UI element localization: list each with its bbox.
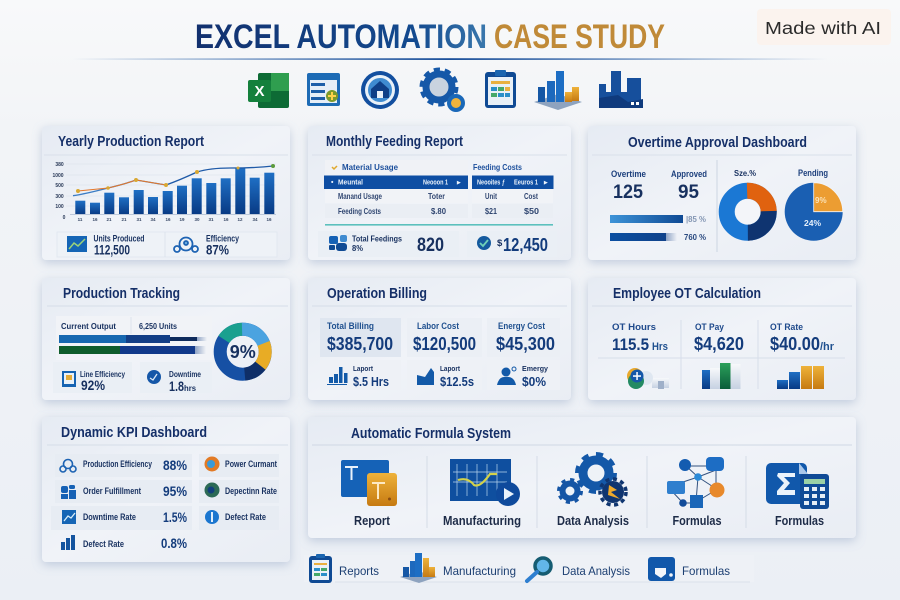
heading: Yearly Production Report xyxy=(58,133,204,150)
table: Material Usage xyxy=(342,162,398,172)
heading: Overtime Approval Dashboard xyxy=(628,134,807,151)
metric: OT pay xyxy=(694,322,744,354)
progress bars: 760 % xyxy=(684,233,706,242)
metric: total billing: Total Billing xyxy=(327,321,374,331)
table: Feeding Costs xyxy=(473,162,522,172)
overtime figures: Overtime xyxy=(611,169,646,179)
header icon row xyxy=(248,70,643,110)
bar and line chart: 30 xyxy=(194,217,200,222)
metric: OT hours xyxy=(612,322,668,354)
icon: gears xyxy=(422,70,463,110)
bar and line chart: 19 xyxy=(179,217,185,222)
metric: total billing: $385,700 xyxy=(327,334,393,354)
icon: people xyxy=(497,367,516,385)
stats: total feedings and cost: 820 xyxy=(417,235,444,256)
bar and line chart: 31 xyxy=(136,217,142,222)
sub metric: emergy: Emergy xyxy=(522,366,548,373)
stats: downtime: 1.8 xyxy=(169,378,184,394)
chart: OT rate bars xyxy=(777,366,824,389)
KPI: defect rate right xyxy=(205,510,266,524)
icon: line efficiency xyxy=(62,371,76,387)
metric: total billing xyxy=(320,318,401,357)
overtime figures: 125 xyxy=(613,182,643,203)
metric: labor cost: Labor Cost xyxy=(417,321,459,331)
current output bars: 6,250 Units xyxy=(139,321,177,331)
stats: total feedings and cost: Total Feedings xyxy=(352,234,402,244)
stats: total feedings and cost: 8% xyxy=(352,243,363,253)
stats: line efficiency xyxy=(53,362,132,393)
legend: manufacturing xyxy=(400,553,516,583)
KPI: production efficiency xyxy=(60,457,187,473)
panel: overtime approval dashboard xyxy=(588,126,856,260)
metric: OT pay: $4,620 xyxy=(694,334,744,354)
item: formulas calculator: Formulas xyxy=(775,514,824,528)
icon: downtime gauge xyxy=(147,370,161,384)
table: Cost xyxy=(524,191,538,201)
metric: OT rate: /hr xyxy=(820,341,835,353)
bar and line chart: 16 xyxy=(223,217,229,222)
icon: check circle xyxy=(477,236,491,250)
bar and line chart: 16 xyxy=(92,217,98,222)
KPI: power current: Power Curmant xyxy=(225,459,277,469)
icon: excel xyxy=(248,73,289,108)
bar and line chart: 21 xyxy=(121,217,127,222)
metric: OT hours: 115.5 xyxy=(612,335,649,354)
chart: OT pay bars xyxy=(702,363,740,389)
metric: labor cost xyxy=(407,318,482,357)
table: Neooites ƒ xyxy=(477,180,505,186)
sub metric: emergy xyxy=(487,360,560,390)
KPI: production efficiency: Production Efficiency xyxy=(83,459,152,469)
title: CASE STUDY xyxy=(494,18,665,56)
bar and line chart: 31 xyxy=(208,217,214,222)
KPI: order fulfillment xyxy=(61,483,187,499)
panel: dynamic KPI dashboard xyxy=(42,417,290,562)
bar and line chart: 34 xyxy=(150,217,156,222)
metric: OT rate: OT Rate xyxy=(770,322,803,333)
bar and line chart: 300 xyxy=(55,194,64,200)
icon: dial xyxy=(361,71,399,109)
bar and line chart: 0 xyxy=(63,215,66,221)
legend: reports xyxy=(309,554,379,583)
table: $21 xyxy=(485,206,497,216)
icon: factory xyxy=(599,71,643,108)
pie chart: Pending xyxy=(798,168,828,178)
bar and line chart: 21 xyxy=(106,217,112,222)
donut chart: 9% xyxy=(211,320,274,383)
panel: monthly feeding report xyxy=(308,126,571,260)
table: • xyxy=(331,180,334,186)
stats: downtime: hrs xyxy=(184,383,196,393)
table: Meuntal xyxy=(338,180,363,186)
heading: Monthly Feeding Report xyxy=(326,133,463,150)
table: Unit xyxy=(485,191,497,201)
stats: units produced and efficiency: 112,500 xyxy=(94,242,130,258)
metric: energy cost: Energy Cost xyxy=(498,321,545,331)
table: Eeuros 1 xyxy=(514,180,538,186)
overtime figures: 95 xyxy=(678,182,699,203)
badge: made with AI xyxy=(757,9,891,45)
bar and line chart: 100 xyxy=(55,204,64,210)
heading: Automatic Formula System xyxy=(351,425,511,442)
item: data analysis: Data Analysis xyxy=(557,514,629,528)
metric: OT hours: OT Hours xyxy=(612,322,656,333)
table: Manand Usage xyxy=(338,191,382,201)
progress bars: |85 % xyxy=(686,215,706,224)
heading: Production Tracking xyxy=(63,285,180,302)
stats: downtime: Downtime xyxy=(169,370,201,379)
KPI: defect rate right: Defect Rate xyxy=(225,512,266,522)
metric: OT rate: $40.00 xyxy=(770,334,820,354)
metric: labor cost: $120,500 xyxy=(413,334,476,354)
icon: clipboard xyxy=(485,70,516,108)
KPI: power current xyxy=(204,456,277,472)
sub metric: laport hours xyxy=(320,360,401,390)
legend row xyxy=(304,553,754,583)
bar and line chart: 500 xyxy=(55,183,64,189)
KPI: downtime rate: 1.5% xyxy=(163,509,187,525)
donut chart xyxy=(727,168,769,233)
table: ▸ xyxy=(543,180,548,186)
sub metric: emergy: $0% xyxy=(522,374,546,389)
legend: reports: Reports xyxy=(339,564,379,578)
sub metric: laport seconds xyxy=(407,360,482,390)
panel: employee OT calculation xyxy=(588,278,856,400)
current output bars: Current Output xyxy=(61,321,116,331)
sub metric: laport hours: $.5 Hrs xyxy=(353,374,389,389)
item: report: Report xyxy=(354,514,391,528)
bar and line chart: 16 xyxy=(266,217,272,222)
legend: data analysis: Data Analysis xyxy=(562,564,630,578)
heading: Employee OT Calculation xyxy=(613,285,761,302)
heading: Operation Billing xyxy=(327,285,427,302)
panel: yearly production report xyxy=(42,126,290,260)
sub metric: laport hours: Laport xyxy=(353,366,374,373)
stats: total feedings and cost: $ xyxy=(497,238,503,249)
KPI: downtime rate: Downtime Rate xyxy=(83,512,136,522)
progress bars xyxy=(610,215,706,242)
icon: form xyxy=(307,73,340,106)
icon: trend chart xyxy=(67,236,87,252)
stats: units produced and efficiency: 87% xyxy=(206,242,229,258)
bar and line chart: 380 xyxy=(55,162,64,168)
title: EXCEL AUTOMATION xyxy=(195,18,487,56)
pie chart: 24% xyxy=(804,218,821,228)
overtime figures xyxy=(611,169,707,203)
KPI: defect rate: Defect Rate xyxy=(83,539,124,549)
metric: energy cost xyxy=(487,318,560,357)
KPI: defect rate xyxy=(61,535,187,551)
icon: blocks xyxy=(329,235,347,251)
heading: Dynamic KPI Dashboard xyxy=(61,424,207,441)
item: formulas calculator xyxy=(766,463,829,528)
item: manufacturing: Manufacturing xyxy=(443,514,521,528)
KPI: depection rate: Depectinn Rate xyxy=(225,486,277,496)
metric: energy cost: $45,300 xyxy=(496,334,555,354)
icon: coins and globe xyxy=(627,368,669,389)
KPI: order fulfillment: 95% xyxy=(163,483,187,499)
legend: formulas xyxy=(648,557,730,581)
current output bars xyxy=(56,316,212,360)
table: ▸ xyxy=(456,180,461,186)
overtime figures: Approved xyxy=(671,169,707,179)
bar and line chart: 11 xyxy=(78,217,83,222)
metric: OT rate xyxy=(770,322,835,354)
donut chart: 9%: 9% xyxy=(230,342,256,362)
badge: made with AI: Made with AI xyxy=(765,18,881,38)
KPI: downtime rate xyxy=(62,509,187,525)
metric: OT hours: Hrs xyxy=(652,341,668,353)
item: manufacturing xyxy=(443,459,521,528)
table: Neooon 1 xyxy=(423,180,448,186)
item: report xyxy=(341,460,397,528)
bar and line chart: 1000 xyxy=(52,173,64,179)
table: $.80 xyxy=(431,206,446,216)
stats: line efficiency: Line Efficiency xyxy=(80,370,125,379)
bar and line chart: 16 xyxy=(165,217,171,222)
item: data analysis xyxy=(557,454,629,528)
item: formulas network xyxy=(667,457,724,528)
stats: units produced and efficiency xyxy=(57,232,277,258)
icon: excel: X xyxy=(254,83,265,100)
bar and line chart: 12 xyxy=(237,217,243,222)
table: Feeding Costs xyxy=(338,206,381,216)
table xyxy=(324,160,554,226)
icon: building xyxy=(417,368,434,385)
panel: automatic formula system xyxy=(308,417,856,538)
stats: line efficiency: 92% xyxy=(81,377,105,393)
stats: total feedings and cost: 12,450 xyxy=(503,234,548,255)
pie chart: 9% xyxy=(815,196,827,205)
stats: units produced and efficiency: Units Produced xyxy=(94,234,144,244)
panel: operation billing xyxy=(308,278,571,400)
table: Toter xyxy=(428,191,446,201)
KPI: production efficiency: 88% xyxy=(163,457,187,473)
table: $50 xyxy=(524,206,539,216)
legend: formulas: Formulas xyxy=(682,564,730,578)
stats: downtime xyxy=(140,362,212,394)
stats: total feedings and cost xyxy=(318,231,557,257)
icon: efficiency nodes xyxy=(174,238,198,252)
KPI: defect rate: 0.8% xyxy=(161,535,187,551)
panel: production tracking xyxy=(42,278,290,400)
KPI: order fulfillment: Order Fulfillment xyxy=(83,486,141,496)
KPI: depection rate xyxy=(204,482,277,498)
icon: bars xyxy=(327,367,348,385)
donut chart: Sze.% xyxy=(734,168,756,178)
metric: OT pay: OT Pay xyxy=(695,322,725,333)
bar and line chart: 34 xyxy=(252,217,258,222)
sub metric: laport seconds: Laport xyxy=(440,366,461,373)
item: formulas network: Formulas xyxy=(672,514,722,528)
sub metric: laport seconds: $12.5s xyxy=(440,374,474,389)
bar and line chart xyxy=(52,162,276,222)
icon: bar platform xyxy=(534,71,582,110)
pie chart xyxy=(785,168,843,241)
legend: data analysis xyxy=(527,558,630,581)
legend: manufacturing: Manufacturing xyxy=(443,564,516,578)
stats: units produced and efficiency: Efficiency xyxy=(206,234,239,244)
